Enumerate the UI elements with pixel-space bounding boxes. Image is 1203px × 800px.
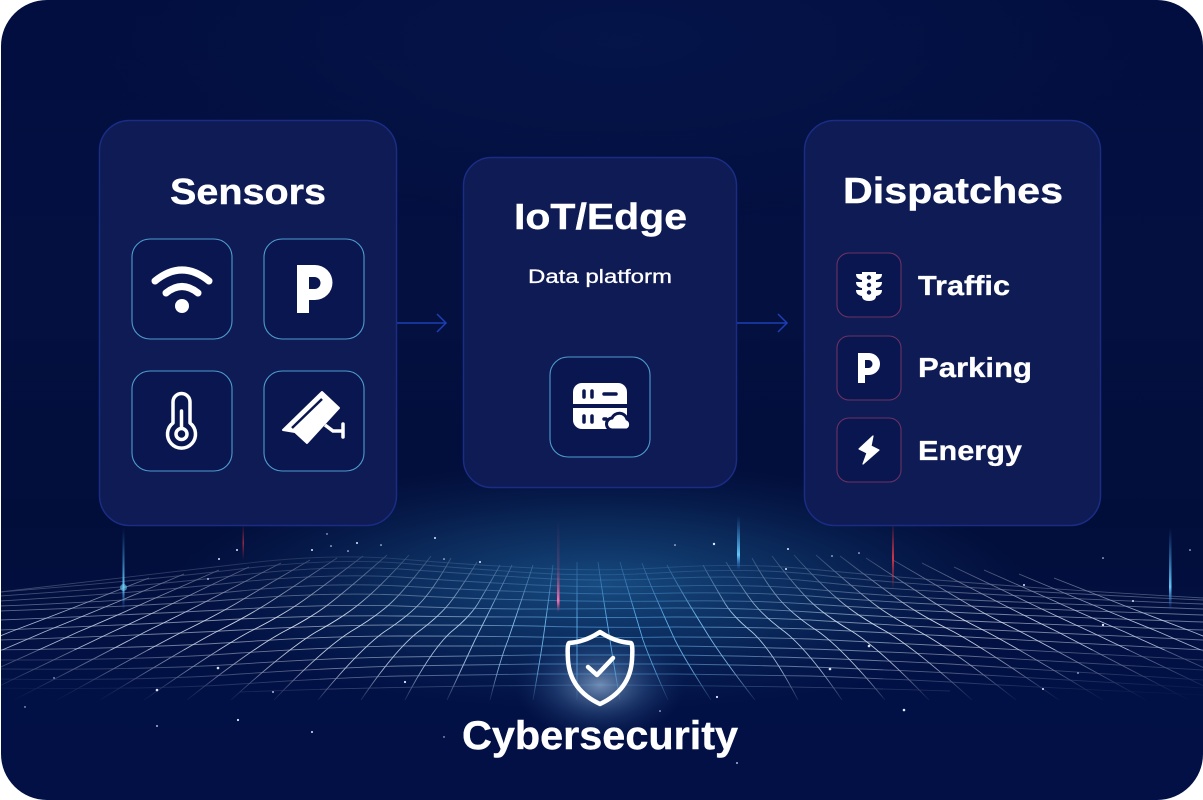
heading: dispatches: Dispatches [843,170,1063,211]
row: parking [837,336,1032,400]
heading: sensors: Sensors [170,171,326,212]
subheading: data platform: Data platform [528,267,672,288]
icon: security camera [264,371,364,471]
heading: iot edge: IoT/Edge [514,196,687,237]
title: cybersecurity: Cybersecurity [462,714,739,758]
panel: sensors [100,120,396,526]
panel: iot edge [464,158,736,488]
icon: wifi [132,239,232,339]
icon: thermometer [132,371,232,471]
perspective mesh grid [0,555,1203,700]
arrow: platform to dispatches [737,314,787,332]
arrow: sensors to platform [397,314,446,332]
star particles [24,533,1191,764]
row: energy [837,418,1022,482]
light beams [120,516,1172,612]
row: energy: Energy [918,435,1022,466]
icon: parking [264,239,364,339]
icon: cloud server [550,357,650,457]
row: traffic [837,253,1010,317]
row: parking: Parking [918,352,1032,383]
panel: dispatches [804,120,1100,526]
icon: shield [568,632,632,704]
row: traffic: Traffic [918,270,1010,301]
